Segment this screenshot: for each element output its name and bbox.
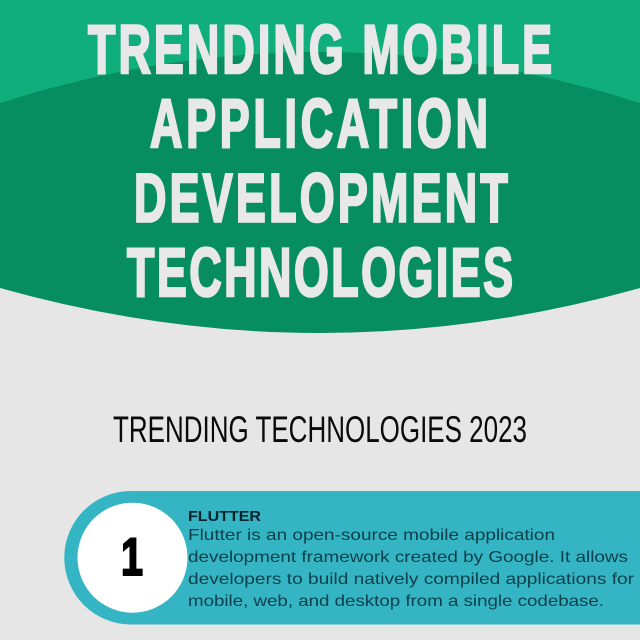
card body text: Flutter is an open-source mobile application bbox=[188, 527, 555, 544]
title: TRENDING MOBILE bbox=[88, 11, 552, 88]
panel: Flutter card bbox=[64, 491, 640, 624]
title: APPLICATION bbox=[150, 85, 488, 162]
header banner: dark green lens bbox=[0, 52, 640, 333]
title: TECHNOLOGIES bbox=[127, 234, 513, 311]
card body text: developers to build natively compiled applications for bbox=[188, 571, 635, 588]
card heading: FLUTTER bbox=[188, 509, 262, 525]
card background bbox=[64, 491, 640, 624]
number badge bbox=[78, 503, 188, 613]
card body text: mobile, web, and desktop from a single codebase. bbox=[188, 593, 604, 610]
number badge: 1 bbox=[121, 528, 143, 587]
title bbox=[88, 11, 552, 311]
card body text bbox=[188, 527, 635, 610]
title: DEVELOPMENT bbox=[134, 160, 508, 237]
card body text: development framework created by Google. It allows bbox=[188, 549, 628, 566]
header banner: light green band bbox=[0, 0, 640, 110]
